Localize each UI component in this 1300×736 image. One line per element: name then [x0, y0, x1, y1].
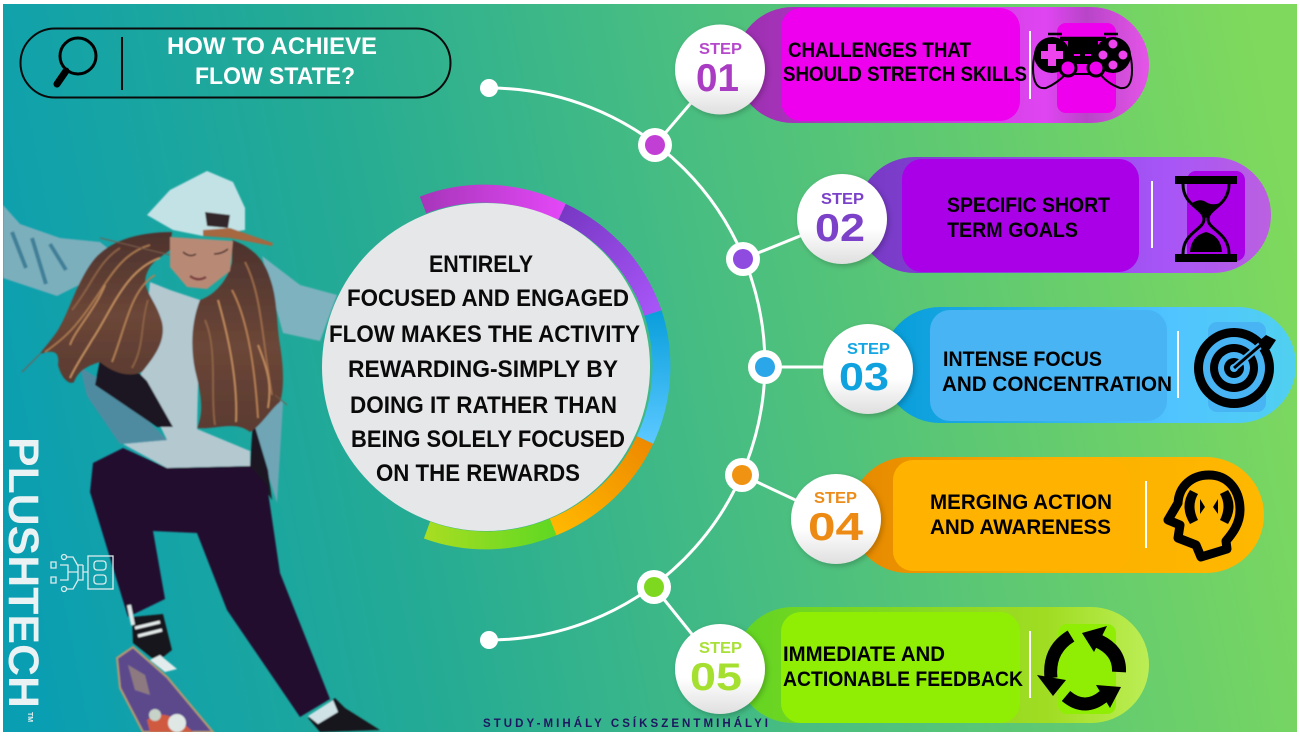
step 2 text: TERM GOALS — [947, 218, 1078, 242]
central text: FOCUSED AND ENGAGED — [347, 285, 629, 312]
step badge 4: STEP — [814, 490, 857, 507]
credit line: STUDY-MIHÁLY CSÍKSZENTMIHÁLYI — [483, 717, 768, 730]
node: step 1 — [638, 128, 672, 162]
timeline arc — [480, 69, 868, 669]
step 3 text: INTENSE FOCUS — [943, 347, 1102, 371]
step 1 text: CHALLENGES THAT — [788, 38, 971, 62]
step badge 5 — [675, 624, 765, 714]
step 5 text — [783, 642, 1023, 691]
panel: step 5 — [675, 607, 1149, 723]
step 1 text — [783, 38, 1027, 86]
brand: PLUSHTECH: PLUSHTECH — [0, 437, 47, 708]
panel: step 4 — [791, 457, 1264, 573]
panel: step 2 — [797, 157, 1271, 273]
central text: DOING IT RATHER THAN — [350, 392, 617, 419]
title bar — [20, 28, 450, 98]
icon: head with sound waves — [1168, 475, 1240, 557]
central text — [329, 251, 640, 487]
title text: HOW TO ACHIEVE — [167, 33, 377, 60]
step badge 2 — [797, 174, 887, 264]
icon: recycle arrows — [1037, 626, 1121, 708]
ring: five coloured segments — [423, 194, 661, 540]
step badge 1: 01 — [696, 57, 739, 100]
step 5 text: IMMEDIATE AND — [783, 642, 945, 666]
step badge 5: STEP — [699, 640, 742, 657]
step badge 4: 04 — [808, 506, 863, 549]
step 4 text — [930, 490, 1112, 539]
step 3 text: AND CONCENTRATION — [942, 372, 1172, 396]
step 2 text: SPECIFIC SHORT — [947, 193, 1110, 217]
step 3 text — [942, 347, 1172, 396]
step badge 3 — [823, 324, 913, 414]
step 2 text — [947, 193, 1110, 242]
step 1 text: SHOULD STRETCH SKILLS — [783, 62, 1027, 86]
central text: REWARDING-SIMPLY BY — [348, 356, 618, 383]
icon: robot logo — [51, 554, 113, 592]
panel: step 3 — [823, 307, 1296, 423]
panel: step 1 — [675, 7, 1149, 123]
step badge 2: 02 — [815, 207, 865, 250]
step 5 text: ACTIONABLE FEEDBACK — [783, 667, 1023, 691]
node: step 4 — [725, 458, 759, 492]
central text: FLOW MAKES THE ACTIVITY — [329, 321, 640, 348]
step badge 1 — [675, 24, 765, 114]
central circle with ring — [322, 194, 661, 540]
node: step 2 — [726, 242, 760, 276]
icon: game controller — [1033, 34, 1132, 88]
step 4 text: AND AWARENESS — [930, 515, 1111, 539]
step badge 5: 05 — [690, 656, 742, 699]
step badge 1: STEP — [699, 41, 742, 58]
title text: FLOW STATE? — [195, 63, 355, 90]
step badge 4 — [791, 474, 881, 564]
node: step 3 — [748, 350, 782, 384]
step badge 3: STEP — [847, 341, 890, 358]
photo: skateboarder — [3, 171, 380, 732]
icon: target — [1194, 328, 1276, 408]
central text: BEING SOLELY FOCUSED — [351, 426, 625, 453]
central text: ON THE REWARDS — [376, 460, 580, 487]
step badge 3: 03 — [839, 356, 889, 399]
step 4 text: MERGING ACTION — [930, 490, 1112, 514]
title text — [167, 33, 377, 90]
icon: hourglass — [1175, 176, 1237, 262]
hair highlights — [22, 238, 287, 425]
icon: magnifying glass — [57, 38, 96, 84]
brand: PLUSHTECH: TM — [26, 712, 33, 722]
step badge 2: STEP — [821, 191, 864, 208]
central text: ENTIRELY — [429, 251, 533, 278]
node: step 5 — [637, 570, 671, 604]
